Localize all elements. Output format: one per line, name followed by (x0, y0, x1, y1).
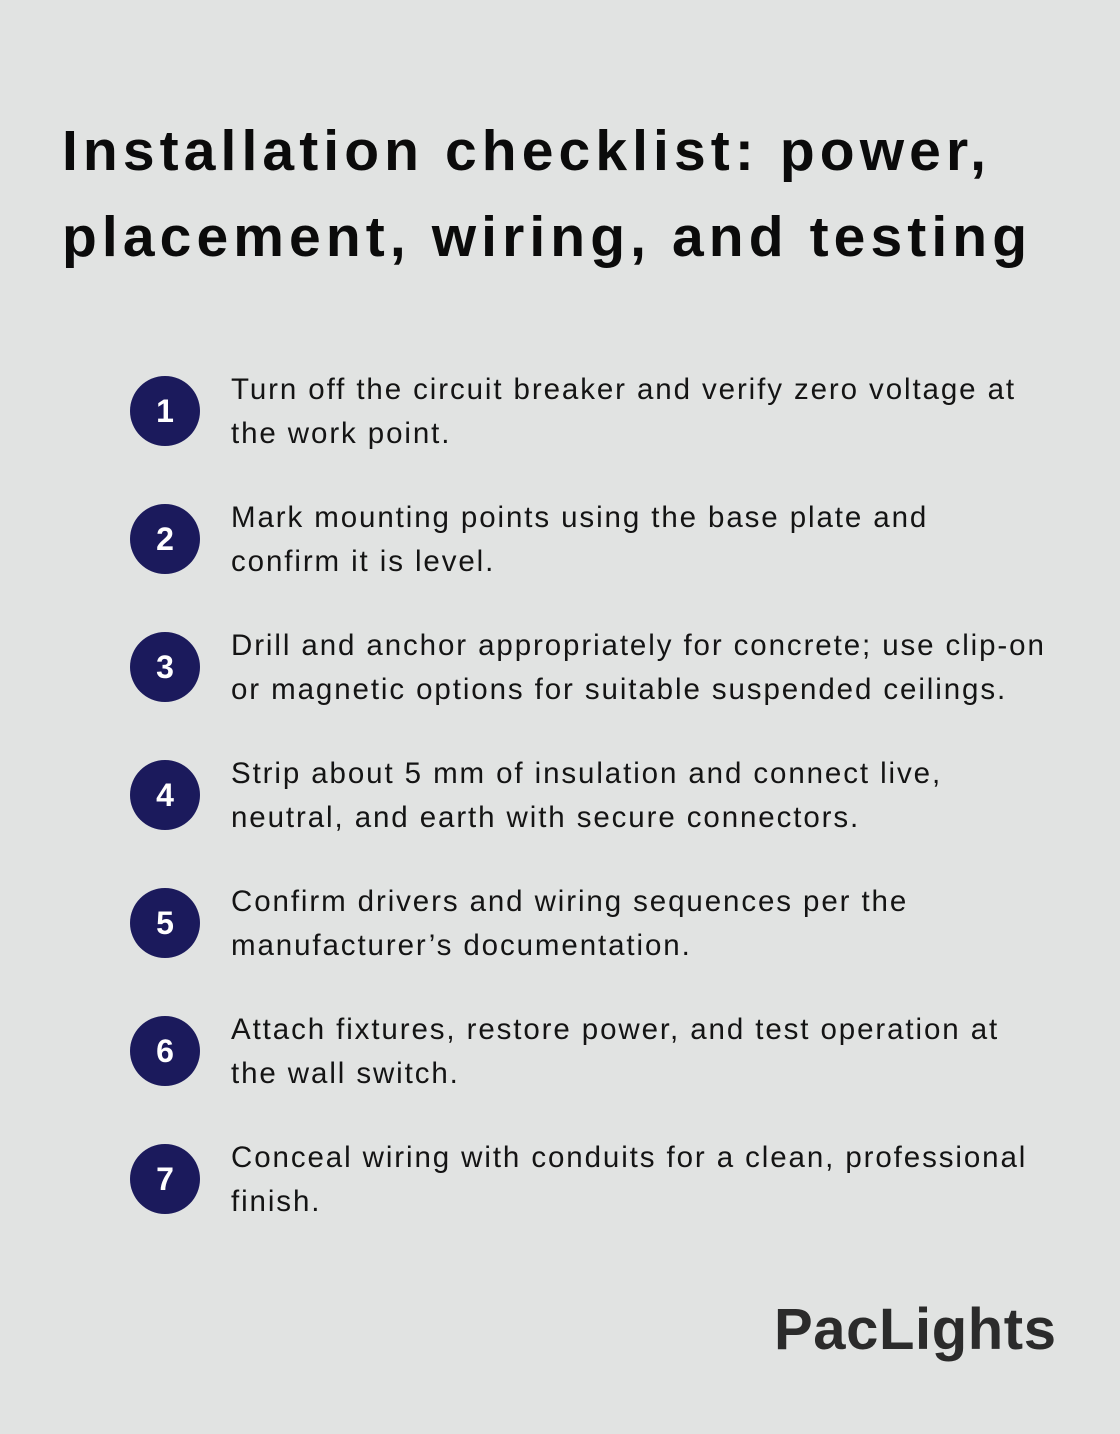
step 7: Conceal wiring with conduits for a clean, professional (231, 1141, 1027, 1174)
step 1: the work point. (231, 417, 451, 450)
step 2: 2 (156, 521, 174, 557)
step 6: the wall switch. (231, 1057, 460, 1090)
step 1: 1 (156, 393, 174, 429)
step 3 (130, 629, 1046, 706)
step 3: Drill and anchor appropriately for concrete; use clip-on (231, 629, 1046, 662)
step 1 (130, 373, 1016, 450)
step 6: 6 (156, 1033, 174, 1069)
step 4: Strip about 5 mm of insulation and connect live, (231, 757, 942, 790)
step 7 (130, 1141, 1027, 1218)
step 5: Confirm drivers and wiring sequences per the (231, 885, 908, 918)
step 5 (130, 885, 908, 962)
step 6: Attach fixtures, restore power, and test operation at (231, 1013, 999, 1046)
step 3: 3 (156, 649, 174, 685)
step 5: manufacturer’s documentation. (231, 929, 692, 962)
title: Installation checklist: power, (62, 119, 991, 183)
title: placement, wiring, and testing (62, 205, 1032, 269)
step 1: Turn off the circuit breaker and verify zero voltage at (231, 373, 1016, 406)
step 3: or magnetic options for suitable suspended ceilings. (231, 673, 1007, 706)
step 4: neutral, and earth with secure connectors. (231, 801, 860, 834)
step 2: confirm it is level. (231, 545, 495, 578)
step 5: 5 (156, 905, 174, 941)
step 4: 4 (156, 777, 174, 813)
step 2 (130, 501, 928, 578)
step 6 (130, 1013, 999, 1090)
logo: PacLights (774, 1297, 1057, 1362)
step 2: Mark mounting points using the base plate and (231, 501, 928, 534)
step 7: finish. (231, 1185, 321, 1218)
step 7: 7 (156, 1161, 174, 1197)
step 4 (130, 757, 942, 834)
title (62, 119, 1032, 269)
